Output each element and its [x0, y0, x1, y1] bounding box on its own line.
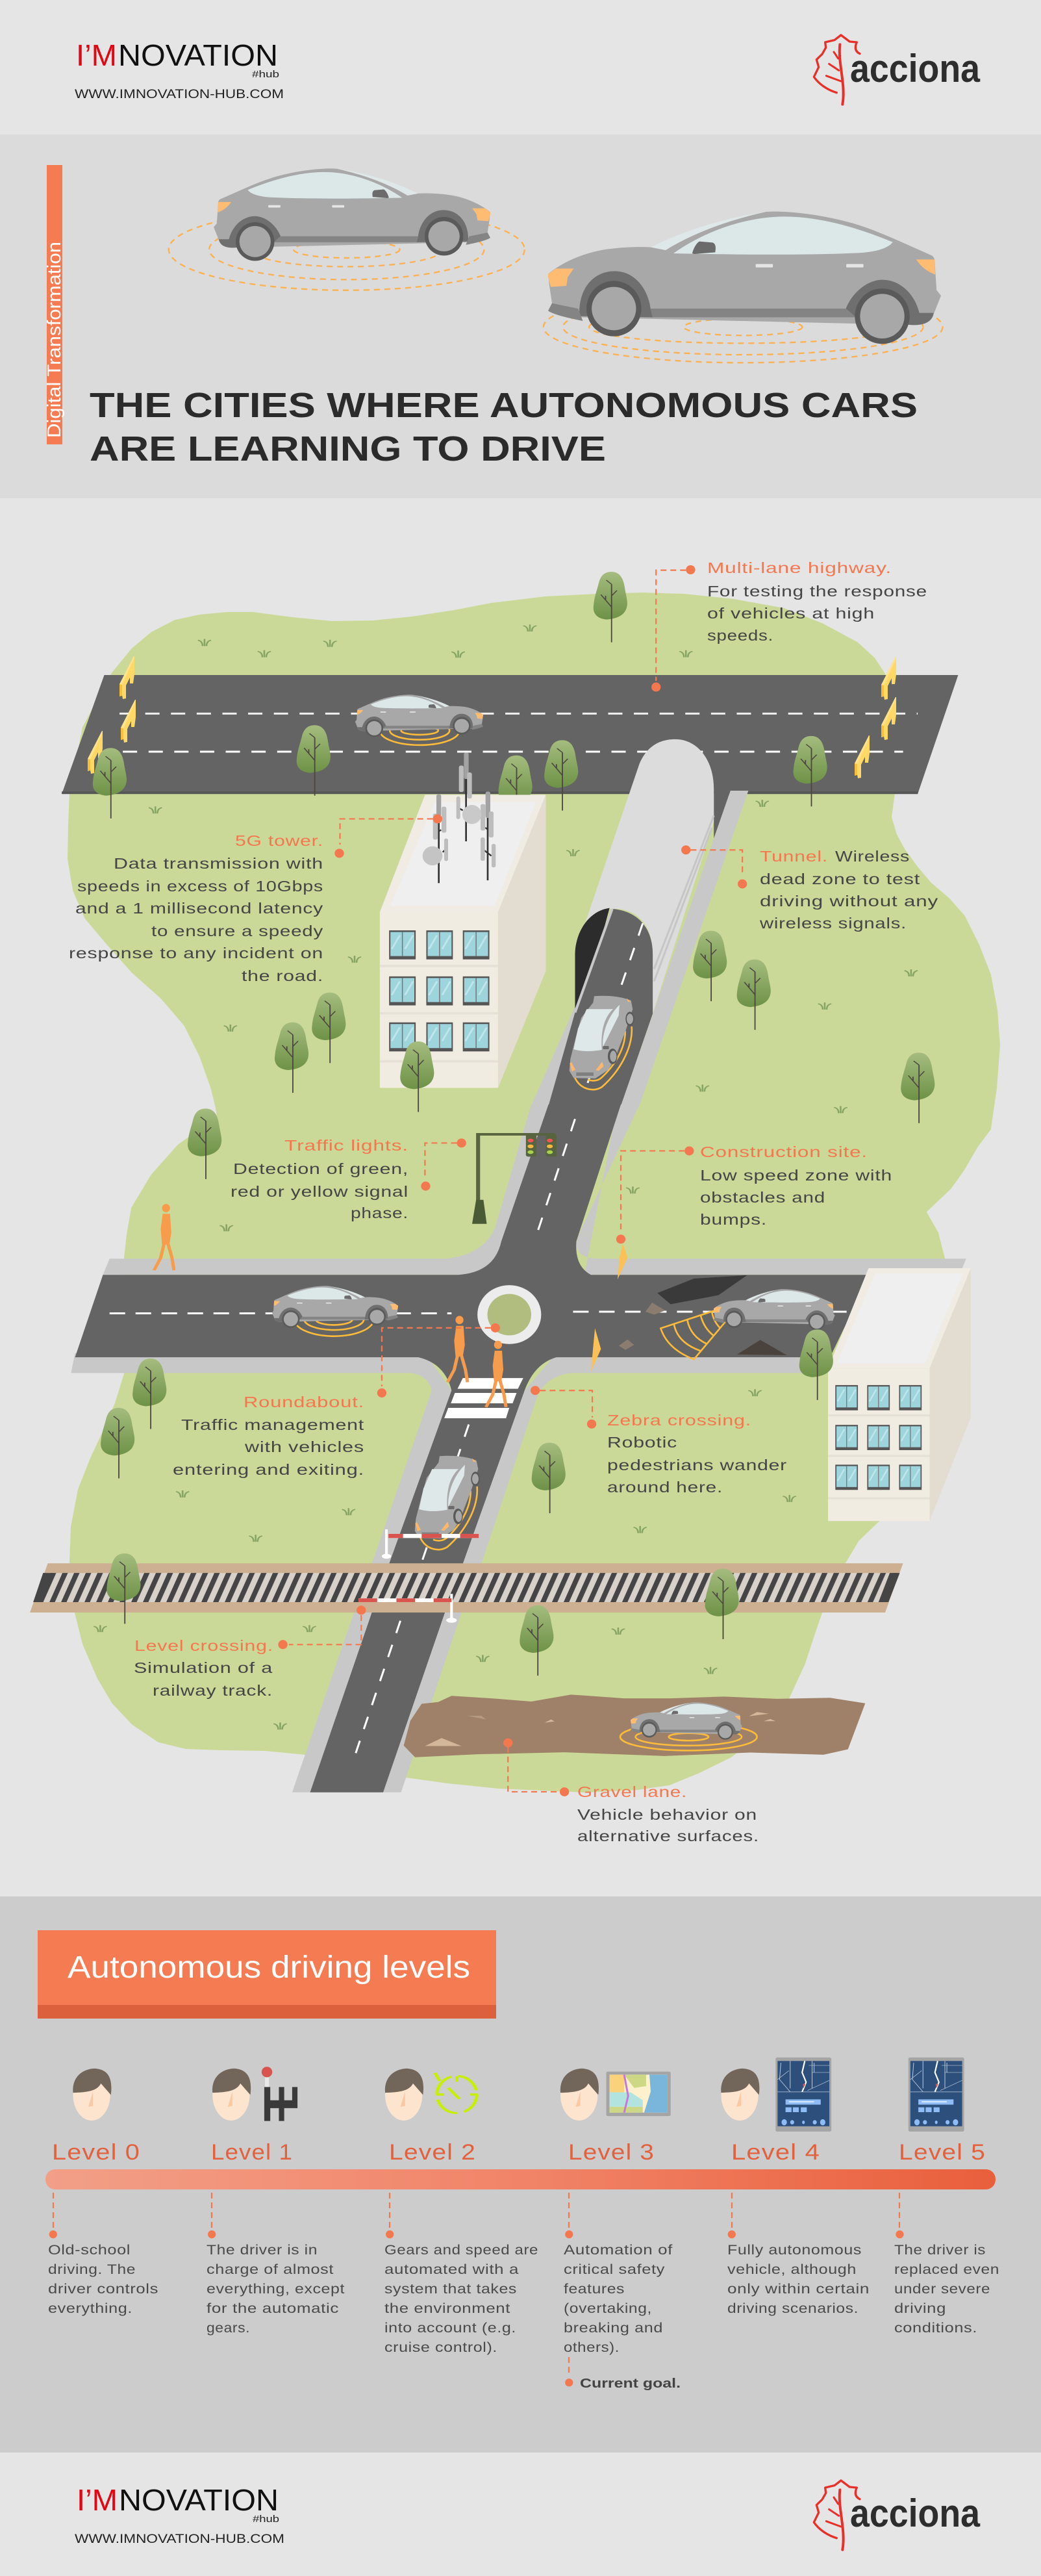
level 2 text: automated with a [384, 2262, 519, 2277]
callout: level crossing [134, 1605, 366, 1699]
background: header band [0, 0, 1041, 134]
callout: zebra crossing [531, 1386, 787, 1496]
background: map area [0, 498, 1041, 1896]
railway track [30, 1563, 903, 1613]
callout: 5G tower: speeds in excess of 10Gbps [77, 878, 323, 895]
callout: level crossing: railway track. [153, 1682, 273, 1699]
tunnel car [570, 996, 634, 1090]
callout: roundabout: entering and exiting. [173, 1461, 364, 1478]
level 3 text: features [564, 2282, 625, 2297]
car below crossing [415, 1456, 480, 1549]
callout: 5G tower: and a 1 millisecond latency [75, 900, 323, 917]
level 0 text: driver controls [48, 2282, 158, 2297]
logo: I'MNOVATION header: #hub [252, 69, 279, 80]
background: levels panel [0, 1896, 1041, 2453]
level 0 text [48, 2243, 158, 2316]
5G antennas [423, 752, 495, 883]
car on highway [355, 695, 483, 745]
level labels [52, 2140, 986, 2165]
callout: level crossing: Level crossing. [134, 1637, 273, 1654]
level 4 text: vehicle, although [727, 2262, 857, 2277]
illustration: car with sensor rings, large [544, 212, 943, 363]
callout: tunnel [681, 845, 938, 932]
road: main junction [71, 1104, 966, 1564]
callout: construction site: Low speed zone with [700, 1167, 892, 1184]
callout: traffic lights: phase. [351, 1205, 408, 1221]
callout: construction site: Construction site. [700, 1143, 868, 1160]
level 5 text: replaced even [894, 2262, 999, 2277]
construction site: holes, rocks, cones [591, 1243, 787, 1372]
5G building [380, 795, 546, 1088]
logo: I'MNOVATION footer [75, 2483, 284, 2546]
zebra crossing [444, 1378, 523, 1418]
level 1 text: gears. [207, 2321, 250, 2336]
level 3 text: Automation of [564, 2243, 673, 2258]
logo: I'MNOVATION footer: NOVATION [119, 2483, 279, 2517]
callout: roundabout: Roundabout. [244, 1394, 364, 1410]
level 0 icon: driver [73, 2069, 111, 2121]
heading: Autonomous driving levels: Autonomous driving levels [68, 1950, 470, 1985]
level labels: Level 4 [731, 2140, 820, 2165]
level 2 text: system that takes [384, 2282, 517, 2297]
callout: construction site: obstacles and [700, 1189, 825, 1206]
level 2 text: cruise control). [384, 2340, 497, 2355]
title: ARE LEARNING TO DRIVE [90, 429, 606, 468]
title [90, 386, 918, 468]
robotic pedestrians [154, 1204, 506, 1407]
car with lidar fan [660, 1289, 835, 1359]
callout: gravel lane: Vehicle behavior on [577, 1806, 757, 1823]
callout: multi-lane highway: speeds. [707, 627, 773, 644]
level labels: Level 5 [899, 2140, 986, 2165]
level 2 text: into account (e.g. [384, 2321, 516, 2336]
level 1 text: for the automatic [207, 2301, 339, 2316]
level crossing barriers [358, 1529, 479, 1623]
callout: roundabout [173, 1323, 500, 1478]
traffic lights [472, 1134, 557, 1224]
logo: I'MNOVATION footer: #hub [253, 2514, 279, 2525]
callout: tunnel: Wireless [835, 848, 910, 865]
level 0 text: driving. The [48, 2262, 136, 2277]
level labels: Level 1 [211, 2140, 293, 2165]
road: vertical shoulders towards tunnel [531, 789, 748, 1106]
callout: level crossing: Simulation of a [134, 1659, 273, 1676]
callout: multi-lane highway: of vehicles at high [707, 605, 875, 622]
callout: 5G tower: the road. [242, 967, 323, 984]
callout: traffic lights: Detection of green, [233, 1160, 408, 1177]
level 1 text: The driver is in [207, 2243, 318, 2258]
level 1 text: charge of almost [207, 2262, 334, 2277]
level 2 text: Gears and speed are [384, 2243, 538, 2258]
level 4 text: driving scenarios. [727, 2301, 859, 2316]
callout: multi-lane highway [651, 559, 927, 692]
callout: roundabout: with vehicles [244, 1438, 364, 1455]
level 4 icon: driver and tablet [721, 2058, 831, 2132]
level 1 icon: driver and gear stick [212, 2067, 297, 2121]
callout: 5G tower: to ensure a speedy [151, 923, 323, 939]
callout: 5G tower [69, 814, 442, 984]
roundabout [477, 1285, 541, 1344]
callout: zebra crossing: pedestrians wander [607, 1457, 787, 1473]
level 5 text [894, 2243, 999, 2336]
level 5 text: under severe [894, 2282, 990, 2297]
callout: gravel lane: alternative surfaces. [577, 1828, 759, 1844]
background: footer band [0, 2453, 1041, 2576]
car on gravel [620, 1702, 757, 1750]
level 3 text: breaking and [564, 2321, 663, 2336]
callout: gravel lane [503, 1739, 759, 1844]
current goal note: Current goal. [580, 2377, 681, 2391]
second building [828, 1268, 971, 1521]
callout: traffic lights: Traffic lights. [284, 1137, 408, 1154]
callout: tunnel: Tunnel. [760, 848, 828, 865]
trees, upper map [93, 572, 934, 1123]
grass tufts, upper map [149, 624, 918, 1113]
level 5 text: driving [894, 2301, 946, 2316]
level 3 text: critical safety [564, 2262, 665, 2277]
callout: traffic lights [231, 1137, 466, 1221]
illustration: car with sensor rings, small [169, 168, 525, 290]
level labels: Level 0 [52, 2140, 140, 2165]
level 0 text: everything. [48, 2301, 132, 2316]
callout: roundabout: Traffic management [181, 1416, 364, 1433]
level 5 text: The driver is [894, 2243, 986, 2258]
callout: multi-lane highway: Multi-lane highway. [707, 559, 892, 576]
level 1 text: everything, except [207, 2282, 345, 2297]
tag: Digital Transformation [44, 165, 65, 444]
grass tufts, lower map [94, 1186, 796, 1729]
level 5 icon: tablet [909, 2058, 964, 2132]
callout: tunnel: driving without any [760, 893, 938, 910]
callout: tunnel: dead zone to test [760, 871, 920, 887]
gravel lane [404, 1694, 865, 1757]
background: title band [0, 134, 1041, 498]
level labels: Level 3 [568, 2140, 655, 2165]
highway barriers [88, 656, 896, 778]
logo: I'MNOVATION header: I’M [76, 38, 117, 72]
level 1 text [207, 2243, 345, 2336]
heading: Autonomous driving levels [38, 1930, 496, 2019]
logo: I'MNOVATION header: WWW.IMNOVATION-HUB.COM [75, 88, 284, 101]
level 4 text [727, 2243, 870, 2316]
level 3 icon: driver and navigation map [560, 2069, 671, 2121]
level 5 text: conditions. [894, 2321, 977, 2336]
logo: I'MNOVATION header: NOVATION [118, 38, 278, 72]
callout: zebra crossing: around here. [607, 1479, 723, 1496]
callout: traffic lights: red or yellow signal [231, 1183, 408, 1200]
timeline connectors and dots [49, 2193, 904, 2386]
car on left road [272, 1286, 398, 1336]
level 3 text [564, 2243, 673, 2355]
callout: gravel lane: Gravel lane. [577, 1783, 687, 1800]
callout: zebra crossing: Robotic [607, 1434, 677, 1451]
trees, lower map [101, 1108, 833, 1676]
logo: I'MNOVATION footer: I’M [77, 2483, 118, 2517]
callout: zebra crossing: Zebra crossing. [607, 1412, 751, 1429]
callout: construction site [616, 1143, 892, 1243]
tunnel [549, 739, 714, 1106]
title: THE CITIES WHERE AUTONOMOUS CARS [90, 386, 918, 425]
logo: I'MNOVATION footer: WWW.IMNOVATION-HUB.COM [75, 2532, 284, 2546]
callout: 5G tower: Data transmission with [114, 855, 323, 872]
logo: acciona header: acciona [850, 47, 981, 90]
level 4 text: Fully autonomous [727, 2243, 862, 2258]
road below railway [292, 1613, 462, 1792]
tree behind building [499, 756, 533, 826]
map: green land [69, 594, 998, 1791]
logo: I'MNOVATION header [75, 38, 284, 101]
logo: acciona footer [814, 2480, 981, 2550]
callout: 5G tower: response to any incident on [69, 945, 323, 962]
level 0 text: Old-school [48, 2243, 131, 2258]
level 3 text: others). [564, 2340, 620, 2355]
level 2 icon: driver and speedometer [385, 2069, 478, 2121]
level 2 text: the environment [384, 2301, 510, 2316]
road: multi-lane highway [62, 675, 958, 794]
tag: Digital Transformation: Digital Transformation [44, 242, 65, 438]
level labels: Level 2 [389, 2140, 476, 2165]
level 4 text: only within certain [727, 2282, 870, 2297]
callout: multi-lane highway: For testing the response [707, 583, 927, 600]
level 2 text [384, 2243, 538, 2355]
logo: acciona footer: acciona [850, 2492, 981, 2535]
level 3 text: (overtaking, [564, 2301, 652, 2316]
callout: tunnel: wireless signals. [759, 915, 907, 932]
gradient timeline bar [45, 2169, 996, 2189]
callout: construction site: bumps. [700, 1211, 767, 1228]
logo: acciona header [814, 35, 981, 105]
callout: 5G tower: 5G tower. [235, 832, 323, 849]
